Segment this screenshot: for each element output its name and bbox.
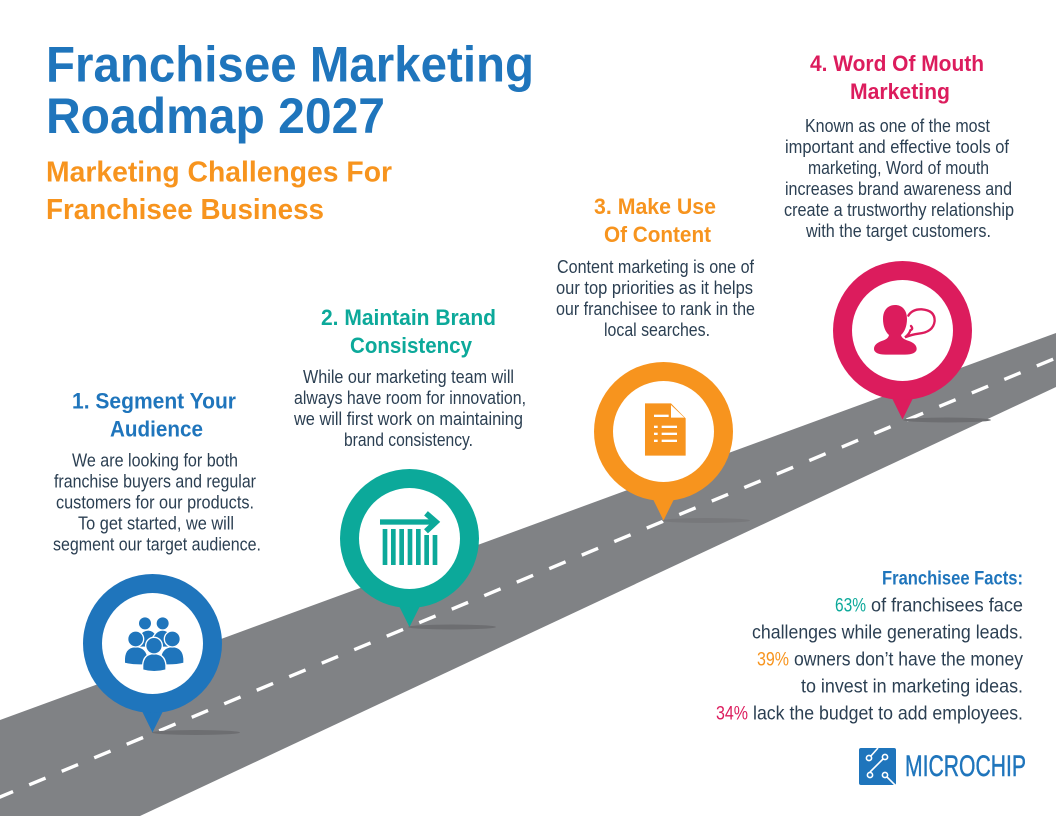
- franchisee facts: [716, 568, 1023, 725]
- step 3 body: local searches.: [604, 320, 710, 340]
- icon: group of people: [124, 617, 184, 672]
- step 3 body: our top priorities as it helps: [556, 278, 753, 298]
- step 1 body: We are looking for both: [72, 451, 238, 471]
- step 3 heading: [594, 194, 716, 247]
- subtitle: [46, 156, 392, 226]
- step 1 body: segment our target audience.: [53, 535, 261, 555]
- pin 3: content: [594, 362, 750, 523]
- fact 2: to invest in marketing ideas.: [801, 676, 1023, 698]
- step 4 body: Known as one of the most: [805, 116, 990, 136]
- step 2 body: [293, 367, 526, 450]
- fact 2: owners don’t have the money: [794, 649, 1023, 671]
- fact 1: of franchisees face: [871, 595, 1023, 617]
- step 1 body: [53, 451, 261, 555]
- fact 1: challenges while generating leads.: [752, 622, 1023, 644]
- step 2 text: [293, 305, 526, 450]
- fact 3: lack the budget to add employees.: [753, 703, 1023, 725]
- step 1 body: To get started, we will: [78, 514, 234, 534]
- step 3 body: [556, 257, 755, 340]
- step 4 body: with the target customers.: [805, 221, 991, 241]
- step 3 body: our franchisee to rank in the: [556, 299, 755, 319]
- facts heading: Franchisee Facts:: [882, 568, 1023, 590]
- step 2 body: brand consistency.: [344, 430, 473, 450]
- subtitle: Franchisee Business: [46, 194, 324, 226]
- step 2 heading: 2. Maintain Brand: [321, 305, 496, 330]
- step 3 heading: 3. Make Use: [594, 194, 716, 219]
- step 4 body: create a trustworthy relationship: [784, 200, 1014, 220]
- step 2 heading: [321, 305, 496, 358]
- step 3 heading: Of Content: [604, 222, 712, 247]
- step 1 heading: [72, 388, 236, 442]
- step 1 body: franchise buyers and regular: [54, 472, 256, 492]
- title: Franchisee Marketing: [46, 36, 534, 92]
- icon: bars with arrow: [380, 513, 437, 565]
- step 4 text: [784, 51, 1014, 241]
- fact 2: [757, 649, 1023, 698]
- title: Roadmap 2027: [46, 87, 385, 144]
- step 4 heading: Marketing: [850, 79, 950, 104]
- step 2 heading: Consistency: [350, 333, 473, 358]
- step 4 heading: 4. Word Of Mouth: [810, 51, 984, 76]
- step 4 body: important and effective tools of: [785, 137, 1010, 157]
- pin 1: audience: [83, 574, 240, 735]
- step 2 body: While our marketing team will: [303, 367, 514, 387]
- step 1 heading: Audience: [110, 416, 203, 442]
- step 1 text: [53, 388, 261, 555]
- fact 1: 63%: [835, 595, 866, 617]
- road: [0, 333, 1056, 816]
- fact 2: 39%: [757, 649, 789, 671]
- fact 1: [752, 595, 1023, 644]
- step 4 heading: [810, 51, 984, 104]
- step 4 body: [784, 116, 1014, 241]
- step 4 body: increases brand awareness and: [785, 179, 1012, 199]
- step 2 body: always have room for innovation,: [294, 388, 526, 408]
- logo: [859, 748, 1026, 785]
- pin 4: word of mouth: [833, 261, 991, 422]
- step 3 body: Content marketing is one of: [557, 257, 755, 277]
- title: [46, 36, 534, 144]
- icon: person speaking: [874, 305, 935, 355]
- step 3 text: [556, 194, 755, 340]
- step 2 body: we will first work on maintaining: [293, 409, 523, 429]
- icon: document: [645, 403, 686, 456]
- step 4 body: marketing, Word of mouth: [808, 158, 989, 178]
- subtitle: Marketing Challenges For: [46, 156, 392, 188]
- step 1 body: customers for our products.: [56, 493, 254, 513]
- logo icon: [859, 748, 896, 785]
- fact 3: 34%: [716, 703, 748, 725]
- step 1 heading: 1. Segment Your: [72, 388, 236, 414]
- pin 2: brand consistency: [340, 469, 496, 630]
